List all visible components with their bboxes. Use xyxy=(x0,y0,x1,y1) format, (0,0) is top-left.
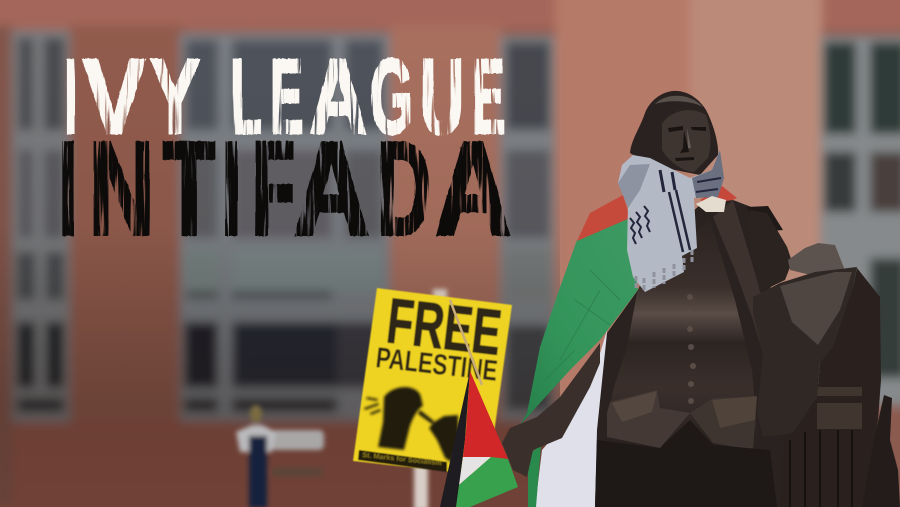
statue: raised arm xyxy=(750,210,792,292)
window middle right xyxy=(500,36,555,421)
title line 2: Intifada: N xyxy=(89,115,154,262)
statue: coat lapel xyxy=(713,200,763,353)
statue: nose highlight xyxy=(687,128,691,148)
keffiyeh fringe xyxy=(636,250,692,292)
title line 1: Ivy League xyxy=(64,38,505,156)
background shading toward the bottom xyxy=(0,0,560,507)
small Palestinian flag on pole xyxy=(440,300,518,507)
title line 2: Intifada: I xyxy=(59,115,77,262)
title line 2: Intifada: I xyxy=(222,115,241,262)
statue: hair xyxy=(630,91,718,175)
statue: left arm and hand xyxy=(502,343,600,477)
title line 1: Ivy League: A xyxy=(309,38,367,156)
statue: breeches xyxy=(595,420,777,507)
keffiyeh scarf xyxy=(618,150,726,292)
title line 2: Intifada: F xyxy=(252,115,295,262)
keffiyeh dark neck fold xyxy=(692,150,724,198)
title line 1: Ivy League: E xyxy=(270,38,303,156)
statue of George Washington xyxy=(502,91,900,507)
window left xyxy=(12,30,70,422)
sign footer band xyxy=(358,450,447,472)
title line 1: Ivy League: L xyxy=(230,38,262,156)
title line 1: Ivy League: Y xyxy=(150,38,200,156)
statue: coat and body xyxy=(595,200,792,507)
statue: pedestal fasces xyxy=(777,268,881,507)
statue: forehead highlight xyxy=(655,96,703,107)
title line 2: Intifada xyxy=(59,115,511,262)
title line 2: Intifada: A xyxy=(294,115,369,262)
statue: waistcoat xyxy=(607,220,757,443)
sign heading: FREE xyxy=(383,284,505,369)
statue cape: Palestinian flag xyxy=(520,186,737,507)
title line 2: Intifada: A xyxy=(435,115,511,262)
keffiyeh folds xyxy=(618,164,650,208)
title line 2: Intifada: D xyxy=(377,115,431,262)
title line 1: Ivy League: U xyxy=(420,38,464,156)
title line 1: Ivy League: G xyxy=(370,38,413,156)
statue: waistcoat pocket flaps xyxy=(607,390,690,448)
statue: hand on cloak xyxy=(788,243,844,277)
statue: draped cloak xyxy=(753,267,857,437)
title line 2: Intifada: T xyxy=(163,115,215,262)
sign subheading: PALESTINE xyxy=(374,342,499,388)
title line 1: Ivy League: V xyxy=(83,38,145,156)
pin xyxy=(696,196,726,212)
background: distant person and post xyxy=(236,289,447,507)
title: Ivy League Intifada: E xyxy=(472,38,505,156)
title: Ivy League Intifada xyxy=(59,38,511,262)
statue: sword hilt xyxy=(862,395,900,507)
title line 1: Ivy League: I xyxy=(64,38,77,156)
sign footer line: St. Marks for Socialism xyxy=(362,452,442,467)
statue: face xyxy=(662,110,710,172)
protest sign: Free Palestine xyxy=(353,284,512,476)
window far right xyxy=(820,36,900,406)
statue: facial features xyxy=(668,126,706,161)
sign icon: clasped fists xyxy=(364,387,459,462)
window center xyxy=(180,33,390,421)
keffiyeh pattern xyxy=(630,170,721,252)
statue: epaulette xyxy=(747,206,783,232)
statue: buttons xyxy=(687,294,696,404)
